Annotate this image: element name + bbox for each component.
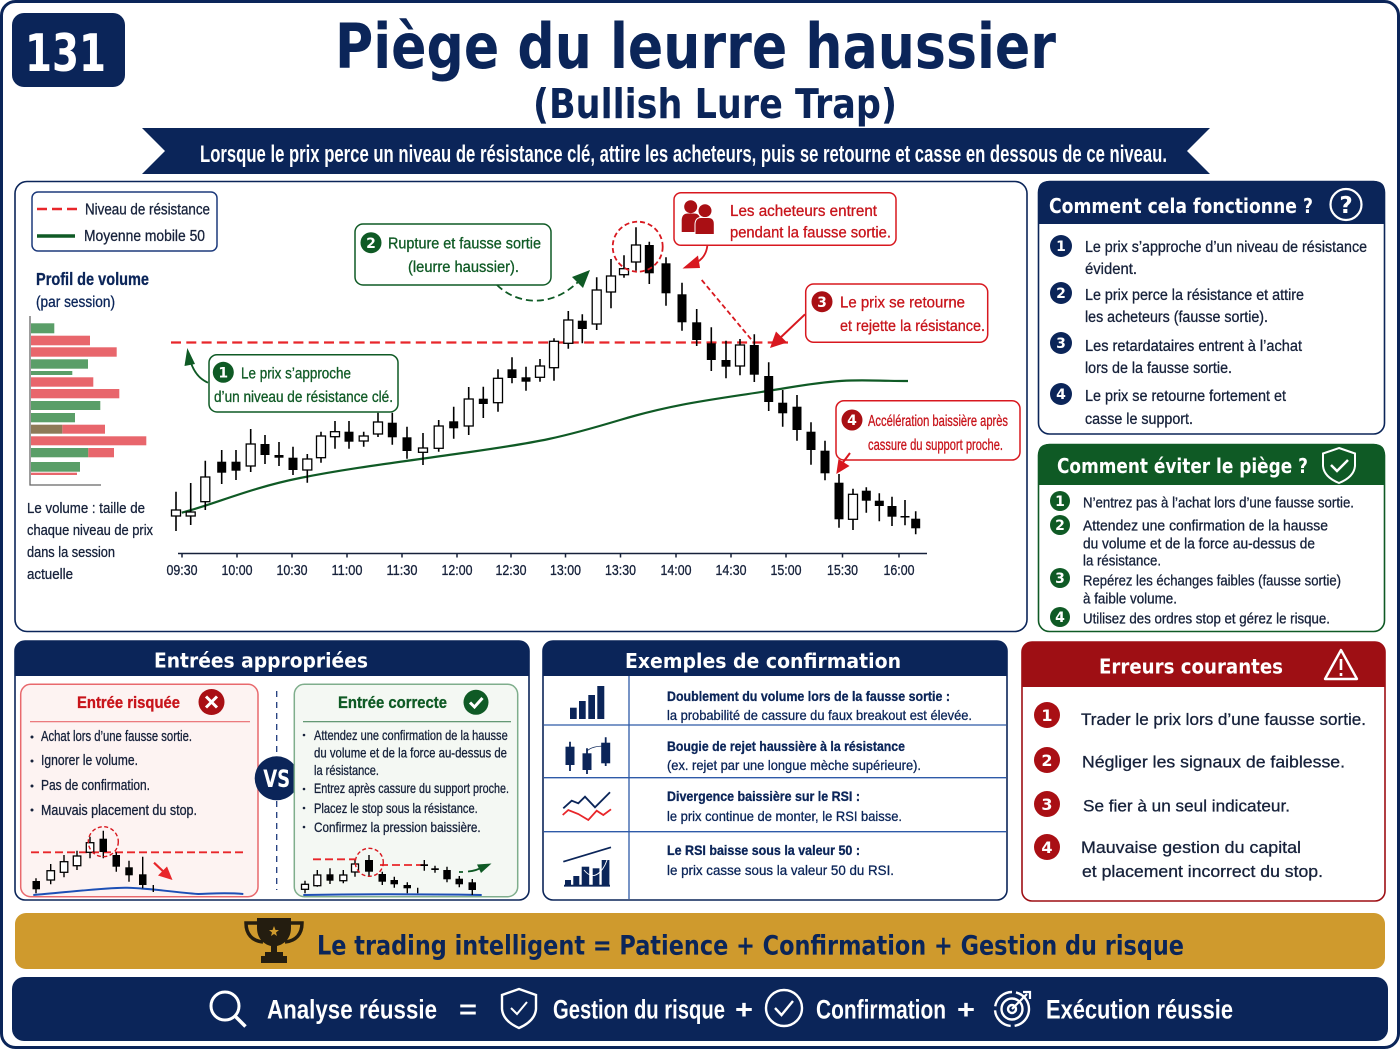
volume note: chaque niveau de prix — [27, 522, 153, 539]
callout: buyers: Les acheteurs entrent — [730, 203, 878, 220]
icon: shield check — [1323, 448, 1355, 483]
mini chart: correct — [302, 848, 492, 895]
callout 1 — [209, 355, 398, 412]
mistakes list: 4 — [1041, 838, 1053, 857]
time axis: 14:30 — [716, 563, 746, 579]
panel: common mistakes — [1022, 642, 1385, 901]
steps list: 4 — [1056, 387, 1066, 403]
avoid list — [1050, 491, 1354, 628]
time axis: 15:30 — [827, 563, 858, 579]
arrow: buyers to peak — [682, 246, 707, 268]
mistakes list — [1034, 702, 1366, 881]
header: confirmation examples — [543, 641, 1007, 676]
text: divergence example: le prix continue de monter, le RSI baisse. — [667, 808, 902, 824]
time axis: 15:00 — [770, 563, 802, 579]
panel: appropriate entries — [15, 641, 529, 900]
callout 2 — [355, 224, 551, 285]
callout 3 — [806, 284, 988, 342]
banner: successful analysis — [12, 977, 1388, 1041]
title — [335, 10, 1056, 128]
arrow: to resistance — [184, 348, 208, 383]
mistakes list: 1 — [1041, 706, 1053, 725]
header: appropriate entries: Entrées appropriées — [154, 648, 368, 672]
card: correct entry: du volume et de la force au-dessus de — [314, 744, 507, 760]
ribbon subtitle — [142, 128, 1210, 174]
header: confirmation examples: Exemples de confirmation — [625, 649, 901, 673]
card: risky entry: Ignorer le volume. — [41, 753, 138, 769]
text: rejection example: Bougie de rejet haussière à la résistance — [667, 738, 905, 754]
icon: magnifier — [211, 992, 246, 1026]
callout 4 — [836, 401, 1020, 460]
banner: successful analysis: Analyse réussie — [267, 994, 437, 1024]
banner: successful analysis: Gestion du risque — [553, 994, 725, 1024]
panel: chart — [15, 182, 1027, 632]
mistakes list: Trader le prix lors d’une fausse sortie. — [1081, 710, 1366, 729]
avoid list: la résistance. — [1083, 554, 1161, 570]
steps list: casse le support. — [1085, 411, 1193, 428]
legend: Moyenne mobile 50 — [84, 228, 205, 245]
steps list: Les retardataires entrent à l’achat — [1085, 338, 1303, 355]
callout 4: cassure du support proche. — [868, 437, 1003, 454]
resistance line — [171, 341, 788, 344]
icon: target — [995, 992, 1030, 1026]
legend — [32, 192, 217, 251]
text: divergence example: Divergence baissière sur le RSI : — [667, 788, 860, 804]
panel: confirmation examples — [543, 641, 1007, 900]
banner: successful analysis: Confirmation — [816, 994, 946, 1024]
time axis: 09:30 — [166, 563, 198, 579]
avoid list: Attendez une confirmation de la hausse — [1083, 518, 1328, 534]
mistakes list: Négliger les signaux de faiblesse. — [1082, 752, 1345, 772]
badge: number 131 — [12, 13, 125, 87]
volume note: dans la session — [27, 544, 115, 561]
mini chart: risky — [31, 827, 245, 895]
time axis: 10:30 — [276, 563, 308, 579]
time axis: 10:00 — [222, 563, 252, 579]
icon: rejection candles — [566, 737, 610, 774]
volume note — [27, 500, 153, 583]
avoid list: Utilisez des ordres stop et gérez le risque. — [1083, 612, 1330, 628]
icon: check circle — [766, 990, 802, 1026]
time axis: 12:30 — [496, 563, 526, 579]
volume note: actuelle — [27, 566, 73, 583]
icon: buyers — [682, 200, 714, 234]
mistakes list: 2 — [1041, 751, 1053, 770]
banner: successful analysis: + — [957, 994, 975, 1024]
card: risky entry: Mauvais placement du stop. — [41, 803, 197, 819]
heading: volume profile: Profil de volume — [36, 269, 149, 289]
avoid list: Repérez les échanges faibles (fausse sortie) — [1083, 574, 1341, 590]
steps list: lors de la fausse sortie. — [1085, 360, 1232, 377]
time axis: 16:00 — [884, 563, 914, 579]
time axis: 12:00 — [442, 563, 472, 579]
callout 4: 4 — [847, 413, 857, 429]
callout 3: Le prix se retourne — [840, 294, 965, 312]
text: RSI 50 example: le prix casse sous la valeur 50 du RSI. — [667, 862, 894, 878]
time axis: 11:00 — [332, 563, 362, 579]
card: risky entry: Achat lors d’une fausse sortie. — [41, 729, 192, 745]
avoid list: 2 — [1055, 518, 1065, 534]
legend: Niveau de résistance — [85, 202, 210, 218]
moving average line — [182, 380, 908, 513]
avoid list: 1 — [1055, 494, 1065, 510]
card: correct entry: Confirmez la pression baissière. — [314, 819, 481, 835]
arrow: acceleration — [836, 453, 850, 474]
time axis — [166, 554, 927, 579]
steps list: Le prix s’approche d’un niveau de résistance — [1085, 239, 1367, 256]
icon: question: ? — [1339, 193, 1353, 219]
divider and VS badge: VS — [263, 765, 290, 793]
callout: buyers: pendant la fausse sortie. — [730, 224, 891, 242]
volume profile bars — [30, 316, 146, 485]
mistakes list: et placement incorrect du stop. — [1082, 862, 1323, 881]
card: risky entry — [21, 684, 258, 897]
card: risky entry: Entrée risquée — [77, 693, 180, 712]
avoid list: 3 — [1055, 571, 1065, 587]
icon: RSI divergence — [563, 792, 611, 820]
text: rejection example: (ex. rejet par une longue mèche supérieure). — [667, 757, 921, 773]
mistakes list: 3 — [1041, 795, 1053, 814]
card: correct entry: Attendez une confirmation de la hausse — [314, 727, 508, 743]
card: correct entry: Placez le stop sous la résistance. — [314, 800, 478, 816]
time axis: 13:30 — [605, 563, 636, 579]
callout 1: 1 — [218, 366, 228, 382]
steps list: 3 — [1056, 336, 1066, 352]
icon: question — [1330, 189, 1362, 220]
avoid list: à faible volume. — [1083, 592, 1177, 608]
card: correct entry: Entrée correcte — [338, 693, 447, 712]
text: volume example: la probabilité de cassure du faux breakout est élevée. — [667, 707, 972, 723]
dashed path to rejection — [702, 280, 752, 340]
banner: successful analysis: + — [735, 994, 753, 1024]
avoid list: du volume et de la force au-dessus de — [1083, 536, 1315, 552]
callout 4: Accélération baissière après — [868, 413, 1008, 430]
icon: trophy — [246, 918, 302, 963]
text: RSI 50 example: Le RSI baisse sous la valeur 50 : — [667, 842, 860, 858]
icon: warning — [1325, 650, 1357, 679]
volume note: Le volume : taille de — [27, 500, 145, 517]
header: common mistakes: Erreurs courantes — [1099, 654, 1283, 678]
header: how it works: Comment cela fonctionne ? — [1049, 194, 1313, 218]
avoid list: N’entrez pas à l’achat lors d’une fausse sortie. — [1083, 496, 1354, 512]
text: volume example: Doublement du volume lors de la fausse sortie : — [667, 688, 950, 704]
icon: cross — [198, 689, 224, 715]
banner: successful analysis: = — [459, 994, 477, 1024]
text: divergence example — [667, 788, 902, 824]
banner: smart trading: Le trading intelligent = Patience + Confirmation + Gestion du risque — [317, 930, 1184, 962]
title: Piège du leurre haussier — [335, 10, 1056, 83]
text: volume example — [667, 688, 972, 723]
text: RSI 50 example — [667, 842, 894, 878]
badge: number 131: 131 — [25, 24, 106, 84]
divider and VS badge — [255, 691, 299, 890]
callout: buyers — [674, 193, 896, 245]
arrow: false breakout — [497, 270, 590, 301]
header: how to avoid: Comment éviter le piège ? — [1057, 454, 1308, 478]
header: how to avoid — [1038, 444, 1385, 485]
callout 1: Le prix s’approche — [241, 366, 351, 382]
header: how it works — [1038, 181, 1385, 224]
icon: shield — [502, 989, 536, 1028]
arrow: rejection — [770, 314, 805, 348]
icon: check — [464, 690, 488, 715]
steps list: Le prix se retourne fortement et — [1085, 388, 1287, 405]
banner: successful analysis: Exécution réussie — [1046, 994, 1233, 1024]
callout 3: 3 — [817, 295, 827, 311]
icon: RSI under 50 — [563, 847, 611, 886]
avoid list: 4 — [1055, 610, 1065, 626]
mistakes list: Mauvaise gestion du capital — [1081, 838, 1301, 857]
steps list: 1 — [1056, 239, 1066, 255]
time axis: 13:00 — [550, 563, 581, 579]
mistakes list: Se fier à un seul indicateur. — [1083, 796, 1290, 816]
card: correct entry: la résistance. — [314, 762, 379, 778]
steps list: 2 — [1056, 286, 1066, 302]
steps list: Le prix perce la résistance et attire — [1085, 287, 1304, 304]
callout 2: (leurre haussier). — [408, 259, 519, 276]
panel: how it works — [1038, 181, 1385, 434]
callout 1: d’un niveau de résistance clé. — [214, 389, 393, 406]
banner: smart trading — [15, 913, 1385, 969]
steps list: évident. — [1085, 261, 1137, 278]
header: appropriate entries — [15, 641, 529, 676]
time axis: 11:30 — [386, 563, 418, 579]
callout 2: Rupture et fausse sortie — [388, 236, 541, 252]
callout 2: 2 — [366, 236, 376, 252]
callout 3: et rejette la résistance. — [840, 318, 985, 335]
heading: volume profile — [36, 269, 149, 311]
panel: how to avoid — [1038, 444, 1385, 632]
card: risky entry: Pas de confirmation. — [41, 778, 150, 794]
candlesticks — [172, 227, 920, 534]
title: (Bullish Lure Trap) — [533, 80, 897, 128]
header: common mistakes — [1022, 642, 1385, 687]
time axis: 14:00 — [660, 563, 692, 579]
card: correct entry — [294, 684, 518, 897]
heading: volume profile: (par session) — [36, 294, 115, 311]
steps list — [1050, 235, 1367, 428]
steps list: les acheteurs (fausse sortie). — [1085, 309, 1268, 326]
text: rejection example — [667, 738, 921, 773]
card: correct entry: Entrez après cassure du support proche. — [314, 780, 509, 796]
fake breakout circle — [613, 222, 663, 272]
icon: volume bars — [570, 686, 604, 719]
